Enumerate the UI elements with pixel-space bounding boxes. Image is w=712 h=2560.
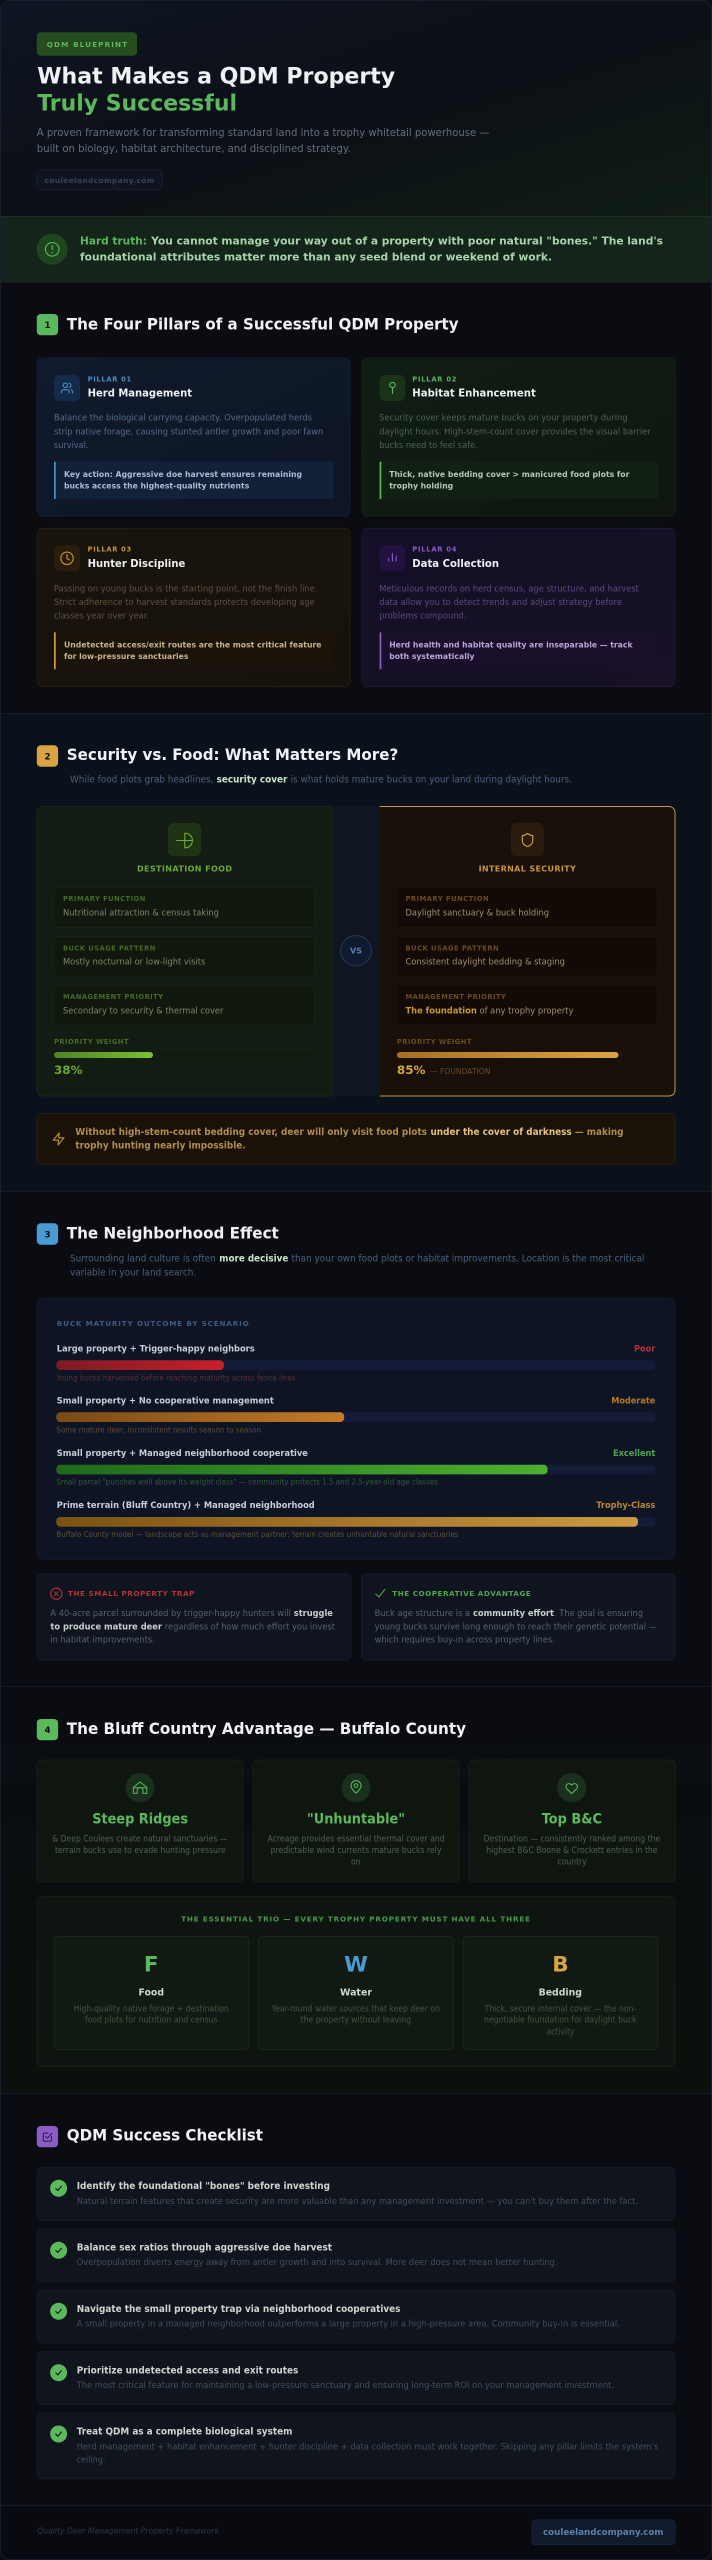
section intro 3: than your own food plots or habitat improvements. Location is the most critical [292, 1253, 644, 1264]
callout: for low-pressure sanctuaries [64, 651, 188, 661]
checklist item 5: Herd management + habitat enhancement + hunter discipline + data collection must work together. Skipping any pillar limits the system's [77, 2443, 659, 2453]
header [36, 32, 490, 190]
card: unhuntable: predictable wind currents mature bucks rely [271, 1846, 441, 1856]
icon: bars [380, 545, 405, 571]
row: buck usage: BUCK USAGE PATTERN [406, 944, 499, 952]
bar: poor: Large property + Trigger-happy neighbors [57, 1344, 255, 1354]
section intro 3: more decisive [219, 1253, 289, 1264]
bar: poor: Poor [634, 1344, 656, 1354]
section intro 3 [70, 1253, 644, 1278]
bar: excellent: Excellent [613, 1449, 655, 1459]
priority bar: 38% [54, 1038, 314, 1077]
bar: excellent: Small property + Managed neighborhood cooperative [57, 1449, 308, 1459]
panel: pillar 01 herd management: strip native forage, causing stunted antler growth and poor fawn [54, 427, 323, 437]
row: primary function: PRIMARY FUNCTION [63, 895, 145, 903]
checklist item 2: Overpopulation diverts energy away from antler growth and into survival. More deer does not mean better hunting. [77, 2258, 558, 2268]
checklist item 5: ceiling. [77, 2455, 105, 2465]
bar: moderate: Some mature deer, inconsistent results season to season [56, 1425, 261, 1434]
footer [37, 2520, 675, 2545]
bar: poor [55, 1344, 656, 1382]
priority bar: 85%: — FOUNDATION [430, 1067, 490, 1076]
section heading 2: 2 [44, 752, 51, 762]
panel: internal security [380, 806, 675, 1096]
panel: small property trap: A 40-acre parcel surrounded by trigger-happy hunters will [50, 1608, 291, 1619]
row: primary function [54, 888, 314, 927]
warning text: — making [575, 1127, 624, 1138]
card: bedding: negotiable foundation for daylight buck [484, 2015, 637, 2025]
bar: excellent: Small parcel "punches well above its weight class" — community protects 1.5 and 2.5-year-old age classes [56, 1478, 438, 1487]
panel: pillar 01 herd management: PILLAR 01 [88, 375, 132, 383]
icon: heart [557, 1773, 586, 1802]
panel: pillar 04 data collection: problems compound. [379, 612, 466, 622]
panel: pillar 03 hunter discipline: classes year over year. [54, 612, 149, 622]
panel: small property trap [37, 1574, 351, 1660]
icon: shield [511, 823, 544, 856]
card: food: food plots for nutrition and census [85, 2015, 218, 2025]
bar chart panel: BUCK MATURITY OUTCOME BY SCENARIO [57, 1319, 249, 1328]
card: bedding: B [552, 1952, 569, 1977]
row: buck usage: Consistent daylight bedding & staging [406, 956, 565, 967]
callout [380, 462, 658, 499]
row: management priority: MANAGEMENT PRIORITY [406, 993, 506, 1001]
section intro 2 [70, 775, 572, 786]
panel: pillar 01 herd management: survival. [54, 441, 88, 451]
section heading 4: 4 [44, 1726, 51, 1736]
panel: VS divider [332, 806, 380, 1096]
subtitle: built on biology, habitat architecture, and disciplined strategy. [37, 143, 351, 155]
checklist item 4: Prioritize undetected access and exit routes [77, 2365, 299, 2376]
row: primary function: Daylight sanctuary & buck holding [406, 908, 549, 919]
icon: map pin [342, 1773, 370, 1802]
panel: pillar 03 hunter discipline: Strict adherence to harvest standards protects developing age [54, 598, 315, 608]
section heading 5: QDM Success Checklist [67, 2127, 264, 2145]
panel: cooperative advantage: Buck age structure is a [375, 1608, 470, 1619]
card: top B&C [469, 1760, 675, 1882]
priority bar: 85%: 85% [397, 1063, 426, 1077]
callout: trophy holding [389, 480, 453, 490]
card: food [54, 1936, 249, 2050]
card: water [258, 1936, 453, 2050]
panel: small property trap: regardless of how much effort you invest [165, 1621, 335, 1632]
section heading 3: The Neighborhood Effect [67, 1224, 279, 1242]
panel: pillar 03 hunter discipline [37, 528, 350, 687]
section heading 1: The Four Pillars of a Successful QDM Property [67, 315, 459, 333]
panel: pillar 01 herd management [37, 358, 350, 516]
card: bedding: Bedding [539, 1987, 582, 1998]
panel: pillar 04 data collection: data allow you to detect trends and adjust strategy before [379, 598, 622, 608]
card: steep ridges: Steep Ridges [92, 1811, 188, 1828]
card: unhuntable: "Unhuntable" [307, 1811, 405, 1828]
bar chart panel [37, 1298, 675, 1560]
callout: Herd health and habitat quality are inseparable — track [389, 639, 633, 649]
card: bedding: activity [547, 2027, 574, 2037]
card: steep ridges: terrain bucks use to evade hunting pressure [55, 1846, 226, 1856]
warning callout [37, 1114, 675, 1164]
card: top B&C: country [558, 1858, 587, 1868]
icon: crosshair plot [168, 823, 201, 856]
card: top B&C: Destination — consistently ranked among the [484, 1834, 660, 1844]
priority bar: 38%: 38% [54, 1063, 83, 1077]
bar: excellent [56, 1449, 656, 1487]
panel: cooperative advantage: community effort [473, 1608, 555, 1619]
panel: pillar 03 hunter discipline: PILLAR 03 [88, 546, 132, 554]
panel: essential trio: THE ESSENTIAL TRIO — EVERY TROPHY PROPERTY MUST HAVE ALL THREE [181, 1914, 530, 1923]
row: management priority: The foundation [406, 1006, 477, 1017]
panel: small property trap: THE SMALL PROPERTY TRAP [68, 1589, 194, 1598]
icon: alert [37, 234, 68, 265]
priority bar: 85% [397, 1038, 658, 1077]
panel: destination food: DESTINATION FOOD [137, 864, 232, 873]
website button: couleelandcompany.com [543, 2527, 663, 2538]
section intro 3: variable in your land search. [70, 1267, 196, 1278]
card: water: W [344, 1952, 368, 1977]
banner text: Hard truth: [80, 236, 147, 247]
card: unhuntable [253, 1760, 459, 1882]
panel: essential trio [37, 1897, 675, 2067]
callout [54, 462, 334, 499]
card: top B&C: highest B&C Boone & Crockett entries in the [486, 1846, 658, 1856]
bar: trophy-class: Buffalo County model — landscape acts as management partner; terrain creates unhuntable natural sanctuaries [56, 1530, 459, 1539]
card: water: Year-round water sources that keep deer on [271, 2004, 440, 2014]
subtitle: A proven framework for transforming standard land into a trophy whitetail powerhouse — [37, 127, 490, 139]
panel: cooperative advantage: THE COOPERATIVE ADVANTAGE [392, 1589, 531, 1598]
row: buck usage: Mostly nocturnal or low-light visits [63, 956, 205, 967]
row: management priority: of any trophy property [480, 1006, 574, 1017]
section intro 3: Surrounding land culture is often [70, 1253, 216, 1264]
panel: pillar 02 habitat enhancement: daylight hours. High-stem-count cover provides the visual barrier [379, 427, 651, 437]
banner text: You cannot manage your way out of a property with poor natural "bones." The land's [150, 236, 663, 247]
panel: pillar 02 habitat enhancement [362, 358, 675, 516]
row: management priority: MANAGEMENT PRIORITY [63, 993, 163, 1001]
checklist item 1 [37, 2167, 675, 2221]
card: steep ridges [37, 1760, 243, 1882]
icon: lightning bolt [53, 1133, 64, 1145]
checklist item 4 [37, 2352, 675, 2405]
section intro 2: is what holds mature bucks on your land during daylight hours. [291, 775, 572, 786]
callout [54, 632, 334, 669]
card: bedding: Thick, secure internal cover — the non- [484, 2004, 636, 2014]
priority bar: 38%: PRIORITY WEIGHT [54, 1038, 129, 1046]
checklist item 5: Treat QDM as a complete biological system [77, 2427, 292, 2438]
row: management priority [397, 985, 658, 1025]
row: management priority [54, 985, 314, 1025]
panel: cooperative advantage: . The goal is ensuring [554, 1608, 643, 1619]
row: primary function: Nutritional attraction & census taking [63, 908, 219, 919]
panel: pillar 02 habitat enhancement: PILLAR 02 [412, 375, 457, 383]
panel: cooperative advantage [362, 1574, 675, 1660]
title: What Makes a QDM Property [37, 63, 396, 89]
title [37, 63, 396, 117]
warning text [75, 1127, 623, 1152]
callout: both systematically [389, 651, 475, 661]
warning text: trophy hunting nearly impossible. [75, 1141, 246, 1152]
warning text: Without high-stem-count bedding cover, deer will only visit food plots [75, 1127, 427, 1138]
section heading 3: 3 [44, 1230, 51, 1240]
panel: pillar 01 herd management: Herd Management [88, 387, 192, 400]
panel: pillar 02 habitat enhancement: Habitat Enhancement [412, 387, 536, 400]
card: steep ridges: & Deep Coulees create natural sanctuaries — [52, 1834, 228, 1844]
panel: pillar 04 data collection: Meticulous records on herd census, age structure, and harvest [379, 584, 639, 594]
section heading 2: Security vs. Food: What Matters More? [67, 746, 398, 764]
checklist item 1: Natural terrain features that create security are more valuable than any management investment — you can't buy them after the fact. [77, 2197, 638, 2207]
icon: clock [54, 545, 80, 571]
panel: small property trap: to produce mature deer [50, 1621, 162, 1632]
section heading 4: The Bluff Country Advantage — Buffalo County [67, 1720, 466, 1738]
panel: pillar 04 data collection [362, 528, 675, 687]
priority bar: 85%: PRIORITY WEIGHT [397, 1038, 472, 1046]
bar: trophy-class: Trophy-Class [596, 1501, 655, 1511]
card: food: Food [138, 1987, 164, 1998]
icon: x circle [51, 1588, 62, 1599]
section intro 2: security cover [217, 775, 288, 786]
icon: home [126, 1773, 154, 1802]
checklist item 3 [37, 2290, 675, 2343]
panel: pillar 03 hunter discipline: Hunter Discipline [88, 557, 185, 570]
callout: Undetected access/exit routes are the most critical feature [64, 639, 322, 649]
card: food: High-quality native forage + destination [74, 2004, 229, 2014]
banner text [80, 236, 663, 263]
tag: QDM blueprint: QDM BLUEPRINT [47, 40, 127, 49]
panel: VS divider: VS [350, 947, 362, 956]
section intro 2: While food plots grab headlines, [70, 775, 213, 786]
card: water: Water [340, 1987, 372, 1998]
row: buck usage: BUCK USAGE PATTERN [63, 944, 155, 952]
bar: moderate: Small property + No cooperative management [57, 1397, 274, 1407]
panel: small property trap: in habitat improvements. [50, 1635, 155, 1646]
bar: moderate [56, 1397, 656, 1434]
panel: pillar 02 habitat enhancement: Security cover keeps mature bucks on your property during [379, 414, 628, 424]
panel: pillar 04 data collection: PILLAR 04 [412, 546, 457, 554]
bar: poor: Young bucks harvested before reaching maturity across fence lines [55, 1373, 296, 1382]
website pill: couleelandcompany.com [44, 176, 155, 185]
row: buck usage [54, 937, 314, 976]
bar: moderate: Moderate [611, 1397, 655, 1407]
checklist item 3: A small property in a managed neighborhood outperforms a large property in a high-pressure area. Community buy-in is essential. [77, 2320, 620, 2330]
panel: small property trap: struggle [294, 1608, 333, 1619]
card: bedding [463, 1936, 658, 2050]
checklist item 5 [37, 2413, 675, 2479]
website button [532, 2520, 675, 2545]
panel: internal security: INTERNAL SECURITY [479, 864, 576, 873]
callout: Key action: Aggressive doe harvest ensures remaining [64, 469, 302, 479]
panel: pillar 03 hunter discipline: Passing on young bucks is the starting point, not the finish line. [54, 584, 317, 594]
checklist item 4: The most critical feature for maintaining a low-pressure sanctuary and ensuring long-term ROI on your management investment. [76, 2381, 614, 2391]
card: unhuntable: Acreage provides essential thermal cover and [268, 1834, 445, 1844]
warning text: under the cover of darkness [430, 1127, 572, 1138]
row: primary function: PRIMARY FUNCTION [406, 895, 489, 903]
panel: cooperative advantage: young bucks survive long enough to reach their genetic potential — [375, 1621, 657, 1632]
panel: cooperative advantage: which requires buy-in across property lines. [375, 1635, 555, 1646]
bar: trophy-class: Prime terrain (Bluff Country) + Managed neighborhood [57, 1501, 315, 1511]
title: Truly Successful [37, 91, 237, 117]
panel: pillar 02 habitat enhancement: bucks need to feel safe. [379, 441, 478, 451]
bar: trophy-class [56, 1501, 656, 1539]
callout: Thick, native bedding cover > manicured food plots for [389, 469, 630, 479]
panel: pillar 01 herd management: Balance the biological carrying capacity. Overpopulated herds [54, 414, 312, 424]
hard truth banner [0, 216, 712, 283]
checklist item 3: Navigate the small property trap via neighborhood cooperatives [77, 2304, 401, 2315]
banner text: foundational attributes matter more than any seed blend or weekend of work. [80, 252, 552, 263]
footer: Quality Deer Management Property Framework [37, 2527, 219, 2536]
card: food: F [144, 1952, 159, 1977]
callout [380, 632, 658, 669]
tag: QDM blueprint [37, 32, 137, 56]
card: water: the property without leaving [301, 2015, 411, 2025]
row: management priority: Secondary to security & thermal cover [63, 1006, 224, 1017]
icon: check [376, 1590, 385, 1597]
callout: bucks access the highest-quality nutrients [64, 480, 249, 490]
checklist item 2 [37, 2229, 675, 2282]
section heading 1: 1 [44, 321, 51, 331]
checklist item 2: Balance sex ratios through aggressive doe harvest [77, 2243, 333, 2254]
checklist item 1: Identify the foundational "bones" before investing [77, 2181, 330, 2192]
panel: destination food [37, 806, 332, 1096]
card: top B&C: Top B&C [542, 1811, 602, 1828]
row: primary function [397, 888, 658, 927]
icon: people [54, 375, 80, 401]
subtitle [37, 127, 490, 155]
row: buck usage [397, 937, 658, 976]
card: unhuntable: on [351, 1858, 360, 1868]
comparison panel [37, 806, 675, 1096]
icon: plant [380, 375, 405, 401]
website pill [36, 170, 162, 190]
panel: pillar 04 data collection: Data Collection [412, 557, 499, 570]
